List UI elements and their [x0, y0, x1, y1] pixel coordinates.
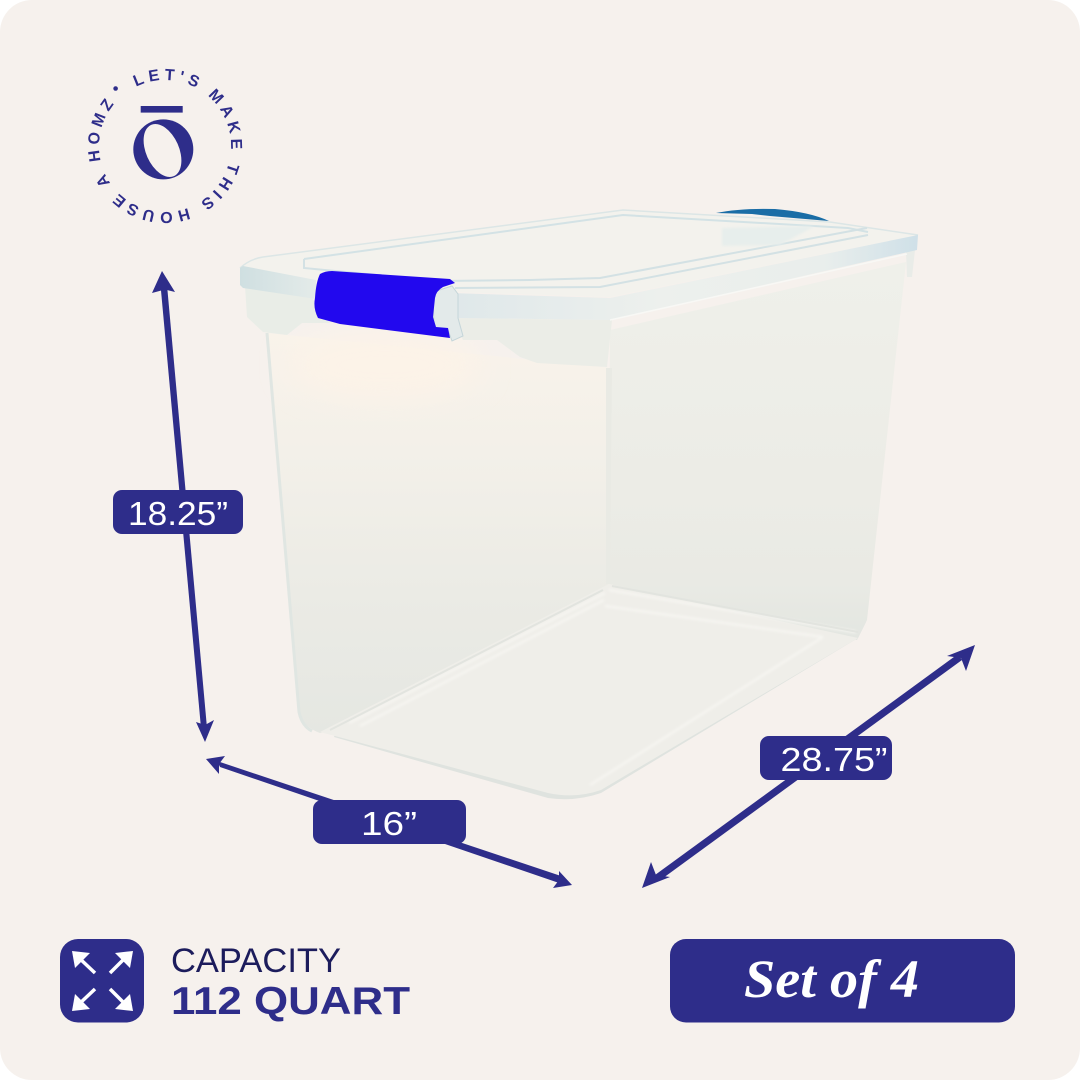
storage tote — [240, 209, 918, 799]
lid top — [240, 210, 918, 297]
height label: 18.25” — [128, 495, 228, 532]
tote right face — [609, 262, 906, 640]
logo badge — [88, 68, 242, 224]
width label: 16” — [361, 805, 417, 842]
capacity icon — [60, 939, 144, 1022]
logo macron bar — [141, 106, 183, 113]
tote corner post — [606, 368, 612, 584]
logo letter o — [133, 118, 193, 183]
slogan dot — [113, 86, 118, 91]
capacity text: 112 QUART — [171, 980, 410, 1023]
left rim skirt — [245, 286, 330, 335]
circular slogan: LET'S MAKE THIS HOUSE A HOMZ — [88, 68, 242, 224]
back handle — [716, 209, 829, 221]
left edge of tote — [267, 333, 312, 731]
set of 4 badge — [670, 939, 1015, 1022]
length arrow — [642, 645, 975, 888]
dimension: height — [113, 271, 243, 742]
right hanging tab — [906, 250, 915, 277]
length label: 28.75” — [780, 741, 888, 778]
tote floor — [320, 584, 858, 795]
width label — [313, 800, 466, 844]
tote bottom foot — [334, 622, 866, 799]
dimension: length — [642, 645, 975, 888]
front blue latch — [314, 271, 455, 338]
lid inner front edge — [304, 228, 867, 281]
floor shadow edges — [330, 586, 858, 730]
height label — [113, 490, 243, 534]
tote left face — [267, 333, 612, 733]
length label — [760, 736, 892, 780]
lid outer outline — [240, 210, 918, 268]
left rim band — [240, 266, 316, 299]
latch hinge — [433, 286, 463, 341]
capacity text — [171, 942, 410, 1023]
front rim band — [450, 235, 918, 320]
set of 4 badge: Set of 4 — [744, 949, 919, 1009]
floor inner edges — [349, 590, 856, 785]
front rim skirt — [452, 318, 612, 367]
height arrow — [152, 271, 214, 742]
rim highlight — [610, 254, 907, 320]
width arrow — [206, 756, 572, 888]
capacity text: CAPACITY — [171, 942, 341, 980]
warm reflection — [290, 330, 480, 400]
lid inner back edge — [304, 215, 868, 259]
dimension: width — [206, 756, 572, 888]
lid tint patch — [722, 226, 815, 246]
lid second front edge — [455, 235, 868, 288]
